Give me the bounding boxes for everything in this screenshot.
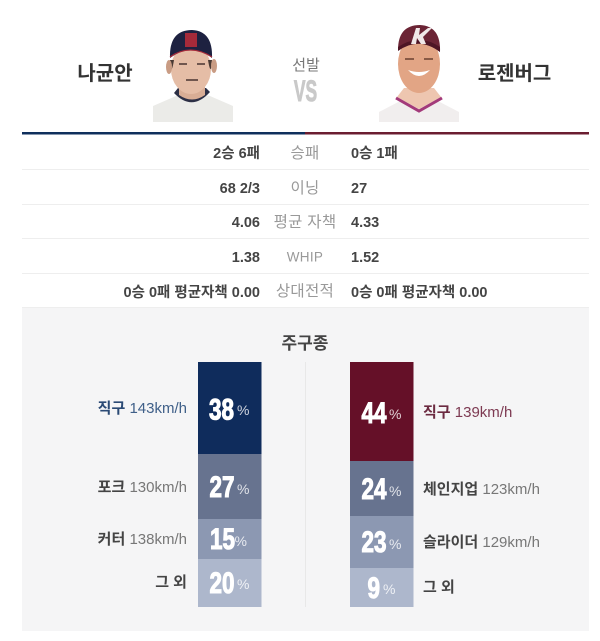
row: win-loss: 승패 [290,144,320,162]
right stacked bar: % [383,581,395,597]
row: WHIP: 1.38 [232,250,260,266]
pitch mix heading: 주구종 [282,334,328,353]
row: head to head: 상대전적 [276,282,334,300]
VS mark: VS [294,75,317,108]
row: head to head [124,282,487,301]
row: win-loss: 2승 6패 [213,145,260,162]
right pitcher photo [379,25,459,122]
header: pitcher matchup [77,25,551,122]
left stacked bar: 38 [209,392,234,426]
right stacked bar: 9 [368,571,380,605]
left stacked bar: % [237,402,249,418]
right stacked bar: % [389,483,401,499]
row: innings: 27 [351,181,367,197]
row: WHIP: 1.52 [351,250,379,266]
left bar labels [98,400,187,591]
left stacked bar: 15 [210,522,235,556]
left stacked bar: % [237,481,249,497]
left stacked bar [198,362,262,607]
stats table [22,144,589,308]
team colour divider [22,132,589,134]
row: WHIP: WHIP [287,250,323,264]
right stacked bar: % [389,406,401,422]
panel: pitch mix [22,308,589,631]
starting label: 선발 [292,57,320,74]
row: win-loss [213,144,398,162]
left pitcher photo [153,30,233,122]
left stacked bar: 27 [210,470,235,504]
right bar labels: 슬라이더 129km/h [423,534,540,551]
left stacked bar: % [234,533,247,549]
row: WHIP [232,250,379,266]
left bar labels: 그 외 [155,574,187,591]
row: ERA [232,213,379,231]
row: ERA: 4.33 [351,215,379,231]
row: win-loss: 0승 1패 [351,145,398,162]
left pitcher name: 나균안 [77,62,133,85]
right stacked bar: 23 [362,525,387,559]
row: head to head: 0승 0패 평균자책 0.00 [124,284,260,301]
row: innings [220,179,367,197]
row: ERA: 4.06 [232,215,260,231]
row: innings: 68 2/3 [220,181,260,197]
right pitcher name: 로젠버그 [478,62,551,85]
left bar labels: 포크 130km/h [98,479,187,496]
row: ERA: 평균 자책 [274,213,336,231]
row: innings: 이닝 [290,179,320,197]
left bar labels: 직구 143km/h [98,400,187,417]
right stacked bar: % [389,536,401,552]
left stacked bar: % [237,576,249,592]
left bar labels: 커터 138km/h [98,531,187,548]
right bar labels: 그 외 [423,579,455,596]
right stacked bar: 44 [362,396,387,430]
right stacked bar [350,362,414,607]
right bar labels: 체인지업 123km/h [423,481,540,498]
right stacked bar: 24 [362,472,387,506]
right bar labels [423,404,540,596]
left stacked bar: 20 [210,566,235,600]
right bar labels: 직구 139km/h [423,404,512,421]
row: head to head: 0승 0패 평균자책 0.00 [351,284,487,301]
